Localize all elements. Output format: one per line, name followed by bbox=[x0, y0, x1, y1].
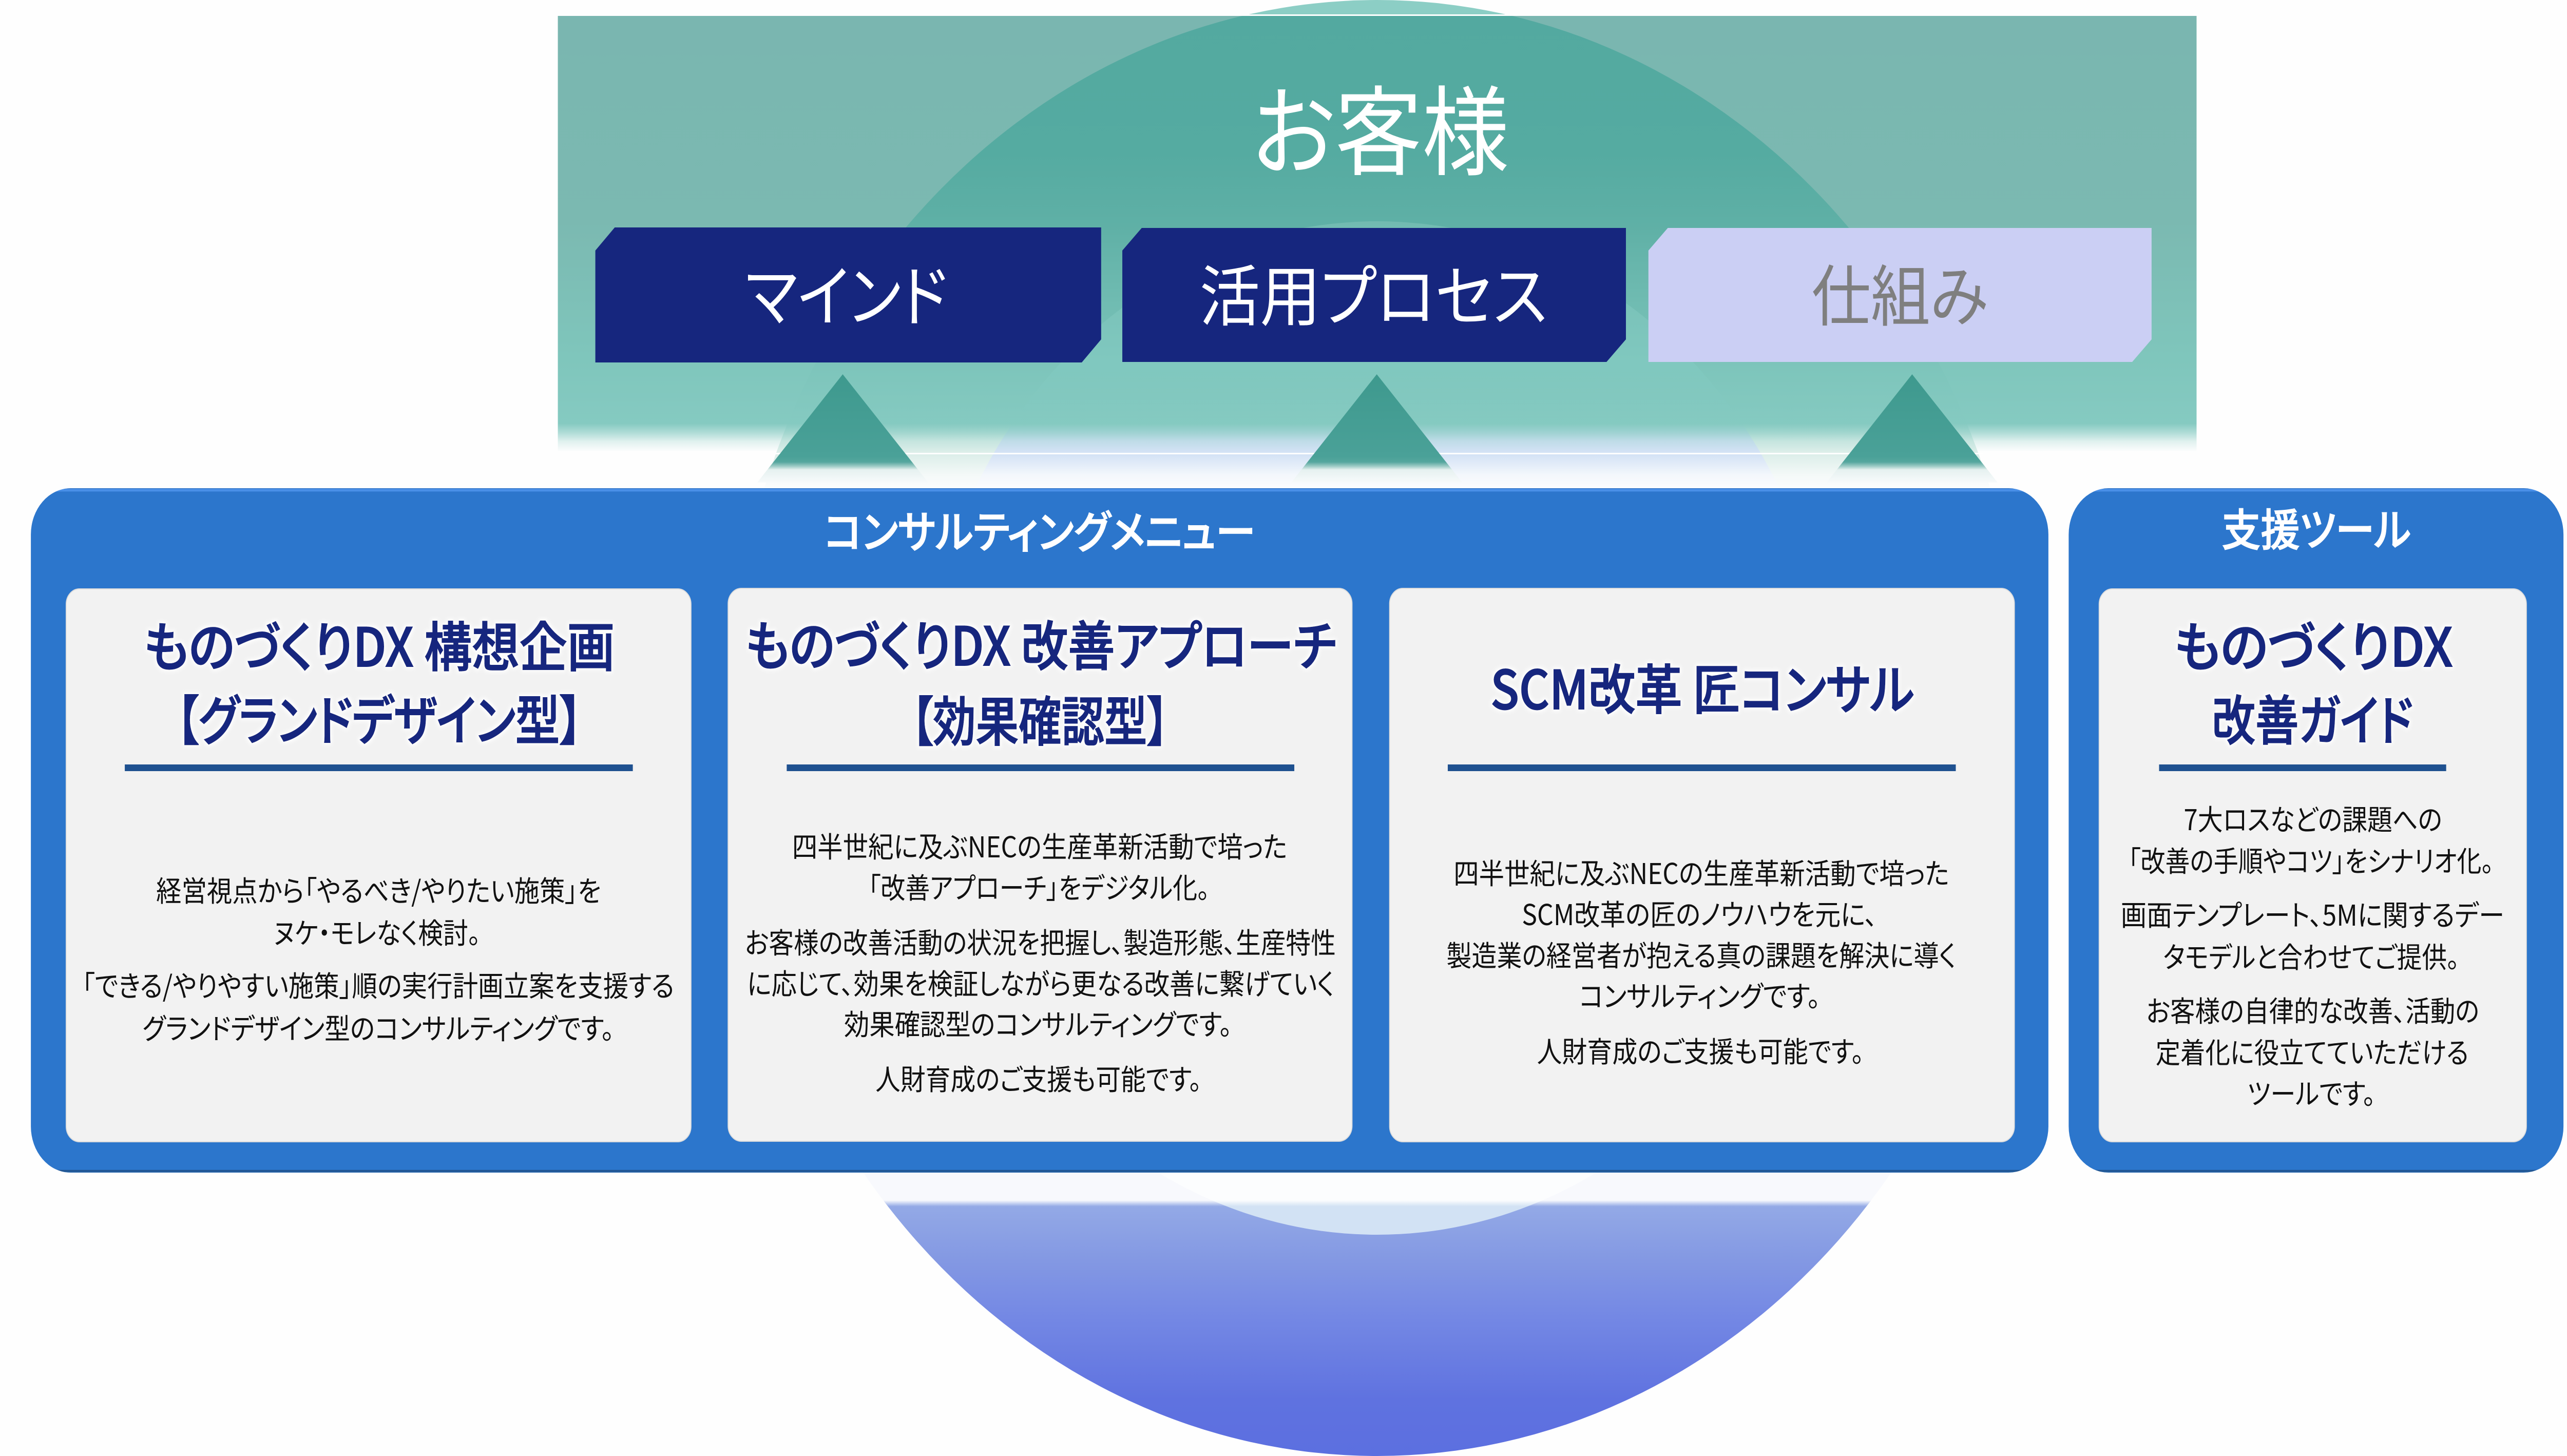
background sphere: inner ellipse bbox=[921, 221, 1834, 1235]
button: mechanism: 仕組み bbox=[1812, 243, 1988, 340]
card heading bbox=[144, 605, 615, 755]
card body text bbox=[1446, 851, 1956, 1071]
heading rule bbox=[787, 764, 1294, 771]
arrow: process bbox=[1291, 374, 1462, 483]
card heading: SCM改革 匠コンサル bbox=[1490, 647, 1914, 724]
arrow: mind bbox=[757, 374, 928, 483]
card body text: 「できる/やりやすい施策」順の実行計画立案を支援する bbox=[82, 964, 674, 1005]
card body text bbox=[82, 869, 674, 1048]
card body text: 四半世紀に及ぶNECの生産革新活動で培った bbox=[1453, 851, 1949, 893]
panel: support tools bbox=[2068, 488, 2563, 1173]
card: SCM bbox=[1390, 588, 2015, 1142]
button: mind bbox=[596, 227, 1101, 362]
sphere tint inside customer band bbox=[906, 16, 1849, 324]
card body text: タモデルと合わせてご提供。 bbox=[2163, 935, 2459, 976]
card body text: ヌケ・モレなく検討。 bbox=[274, 911, 481, 952]
card body text bbox=[745, 825, 1336, 1099]
button: mind: マインド bbox=[745, 243, 947, 340]
arrow: mechanism bbox=[1827, 374, 1998, 483]
card heading bbox=[745, 604, 1336, 756]
card body text: 7大ロスなどの課題への bbox=[2184, 797, 2442, 839]
customer band bbox=[558, 16, 2196, 452]
card body text: ツールです。 bbox=[2247, 1071, 2376, 1113]
card body text: グランドデザイン型のコンサルティングです。 bbox=[142, 1006, 615, 1048]
background sphere: outer ellipse bbox=[728, 0, 2026, 1456]
card body text: 画面テンプレート、5Mに関するデー bbox=[2121, 893, 2504, 934]
card body text: 効果確認型のコンサルティングです。 bbox=[844, 1002, 1232, 1044]
card body text bbox=[2121, 797, 2504, 1113]
card body text: 製造業の経営者が抱える真の課題を解決に導く bbox=[1446, 933, 1956, 975]
card body text: お客様の改善活動の状況を把握し、製造形態、生産特性 bbox=[745, 921, 1336, 962]
card heading: 【効果確認型】 bbox=[911, 679, 1168, 756]
card heading: ものづくりDX 改善アプローチ bbox=[745, 604, 1336, 681]
button: usage process bbox=[1122, 228, 1626, 362]
card heading: ものづくりDX 構想企画 bbox=[144, 605, 615, 682]
button: usage process: 活用プロセス bbox=[1199, 243, 1547, 340]
heading rule bbox=[1448, 764, 1956, 771]
card heading: ものづくりDX bbox=[2174, 605, 2453, 682]
card heading bbox=[2174, 605, 2453, 755]
card body text: 経営視点から「やるべき/やりたい施策」を bbox=[156, 869, 601, 910]
card body text: 「改善の手順やコツ」をシナリオ化。 bbox=[2128, 839, 2494, 880]
card body text: に応じて、効果を検証しながら更なる改善に繋げていく bbox=[747, 962, 1334, 1003]
card heading: 改善ガイド bbox=[2212, 678, 2412, 755]
card: improvement guide bbox=[2099, 589, 2526, 1142]
card body text: 定着化に役立てていただける bbox=[2156, 1030, 2468, 1072]
title: customer: お客様 bbox=[1252, 55, 1509, 196]
card: grand design bbox=[66, 589, 691, 1142]
card body text: 人財育成のご支援も可能です。 bbox=[1537, 1029, 1864, 1071]
card: improvement approach bbox=[728, 588, 1352, 1141]
card body text: コンサルティングです。 bbox=[1579, 974, 1821, 1016]
card body text: 「改善アプローチ」をデジタル化。 bbox=[868, 866, 1210, 907]
card body text: お客様の自律的な改善、活動の bbox=[2147, 989, 2479, 1030]
card body text: SCM改革の匠のノウハウを元に、 bbox=[1522, 892, 1878, 934]
card body text: 人財育成のご支援も可能です。 bbox=[875, 1057, 1202, 1099]
heading rule bbox=[2159, 764, 2446, 771]
button: mechanism bbox=[1649, 228, 2152, 362]
card body text: 四半世紀に及ぶNECの生産革新活動で培った bbox=[792, 825, 1287, 866]
heading: support tools: 支援ツール bbox=[2221, 495, 2411, 559]
heading rule bbox=[125, 764, 633, 771]
card heading: 【グランドデザイン型】 bbox=[177, 678, 582, 755]
heading: consulting menu: コンサルティングメニュー bbox=[824, 497, 1255, 561]
panel: consulting menu bbox=[31, 488, 2048, 1173]
